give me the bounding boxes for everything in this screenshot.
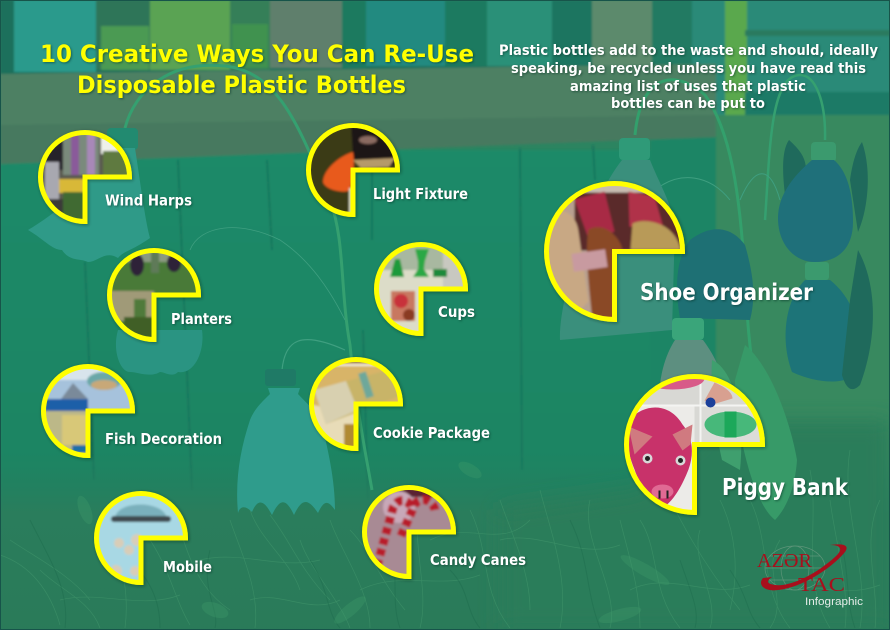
grass field [0,450,890,630]
bottle: shoe organizer backing bottle [560,138,675,340]
item: planters: Planters [171,310,232,328]
stems of the bottle flowers [125,65,825,490]
item: shoe organizer [544,180,814,322]
item: mobile [94,491,212,585]
title [40,40,474,99]
grass blades [0,450,880,628]
title: 10 Creative Ways You Can Re-Use [40,40,474,68]
fence boards [0,150,716,520]
item: mobile: Mobile [163,558,212,576]
intro text: bottles can be put to [611,96,765,112]
bottle flower: planters bell [116,330,203,375]
item: wind harps: Wind Harps [105,192,192,210]
title: Disposable Plastic Bottles [77,71,406,99]
item: light fixture: Light Fixture [373,185,468,203]
item: cookie package: Cookie Package [373,424,490,442]
top strip of coloured fence posts [0,0,890,130]
item: cups [374,242,475,336]
item: shoe organizer: Shoe Organizer [640,280,814,306]
intro text: amazing list of uses that plastic [570,79,806,95]
item: cookie package [309,357,490,451]
bottle flower: centre bell [237,369,335,515]
item: light fixture [306,123,468,217]
bottle: green bottle lower right [660,318,797,520]
intro text [499,43,878,112]
item: fish decoration: Fish Decoration [105,430,222,448]
horizontal beam [0,64,716,164]
item: piggy bank [624,368,849,516]
bottle: dark blue bells on the right [677,140,873,389]
logo: AZERTAC Infographic: TAC [798,574,845,596]
logo: AZERTAC Infographic: AZƏR [757,550,813,572]
logo: AZERTAC Infographic [757,544,864,608]
item: cups: Cups [438,303,475,321]
item: wind harps [38,130,192,224]
leaves on the ground [74,458,672,627]
item: candy canes: Candy Canes [430,551,526,569]
bottle flower: left bell [28,128,150,262]
item: piggy bank: Piggy Bank [722,475,849,501]
item: fish decoration [41,364,222,458]
logo: AZERTAC Infographic: Infographic [805,596,864,608]
item: planters [107,248,232,342]
item: candy canes [362,485,526,579]
board gaps [85,145,595,500]
lawn on the right [716,115,890,515]
